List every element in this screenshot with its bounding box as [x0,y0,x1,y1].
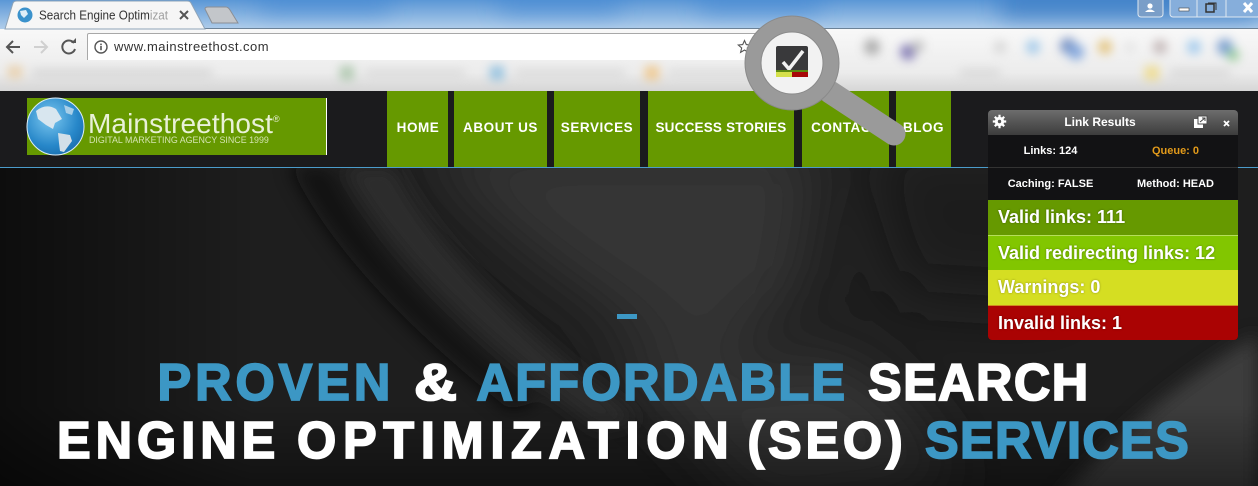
accent dash [617,314,637,319]
heading line 2: OPTIMIZATION [297,411,729,469]
panel: link results [988,110,1238,340]
heading line 2: ENGINE [57,411,275,469]
heading line 1: & [414,354,457,412]
nav: contact: CONTACT [811,120,880,135]
browser tab [4,0,239,30]
nav: contact [802,91,889,167]
heading line 1: PROVEN [158,353,390,411]
result row: invalid links: Invalid links: 1 [998,313,1122,333]
heading line 1: AFFORDABLE [476,353,845,411]
stat: queue: Queue: 0 [1152,145,1199,157]
site header bar [0,91,1258,167]
heading line 2: (SEO) [748,411,903,469]
result row: warnings [988,270,1238,305]
stat: links: Links: 124 [1024,145,1077,157]
result row: invalid links [988,305,1238,340]
icon: info [94,40,108,54]
address bar [87,33,787,60]
result row: valid links: Valid links: 111 [998,207,1125,227]
heading [57,353,1189,470]
nav: services: SERVICES [561,120,633,135]
toolbar: navigation buttons [6,38,76,54]
browser tab: Search Engine Optimizat [39,8,168,22]
nav: about us: ABOUT US [463,120,538,135]
url: www.mainstreethost.com [114,39,269,54]
icon: close [1223,120,1230,127]
magnifying glass with extension icon [744,16,906,146]
nav: blog [896,91,951,167]
icon: settings gear [992,114,1006,128]
logo tagline: DIGITAL MARKETING AGENCY SINCE 1999 [89,135,269,145]
result row: valid links [988,200,1238,235]
panel title bar: Link Results [1064,115,1136,129]
result row: warnings: Warnings: 0 [998,277,1100,297]
result row: valid redirecting links: Valid redirecting links: 12 [998,243,1215,263]
nav: about us [454,91,547,167]
heading line 1: SEARCH [868,353,1088,411]
heading line 2: SERVICES [925,411,1189,469]
nav: home: HOME [397,120,439,135]
heading line 1 [158,353,1088,412]
window controls [1138,0,1258,18]
icon: pop out [1194,116,1208,128]
stat: caching: Caching: FALSE [1008,178,1093,190]
nav: home [387,91,448,167]
result row: valid redirecting links [988,235,1238,270]
stat: method: Method: HEAD [1137,178,1214,190]
icon: globe [26,98,84,156]
nav: blog: BLOG [903,120,944,135]
nav: success stories [648,91,794,167]
icon: check mark badge [776,46,808,77]
logo [27,98,327,155]
heading line 2 [57,411,1189,469]
nav: success stories: SUCCESS STORIES [655,120,787,135]
logo wordmark: Mainstreethost® [88,108,280,139]
nav: services [554,91,640,167]
panel title bar [988,110,1238,135]
icon: bookmark star [737,39,748,54]
